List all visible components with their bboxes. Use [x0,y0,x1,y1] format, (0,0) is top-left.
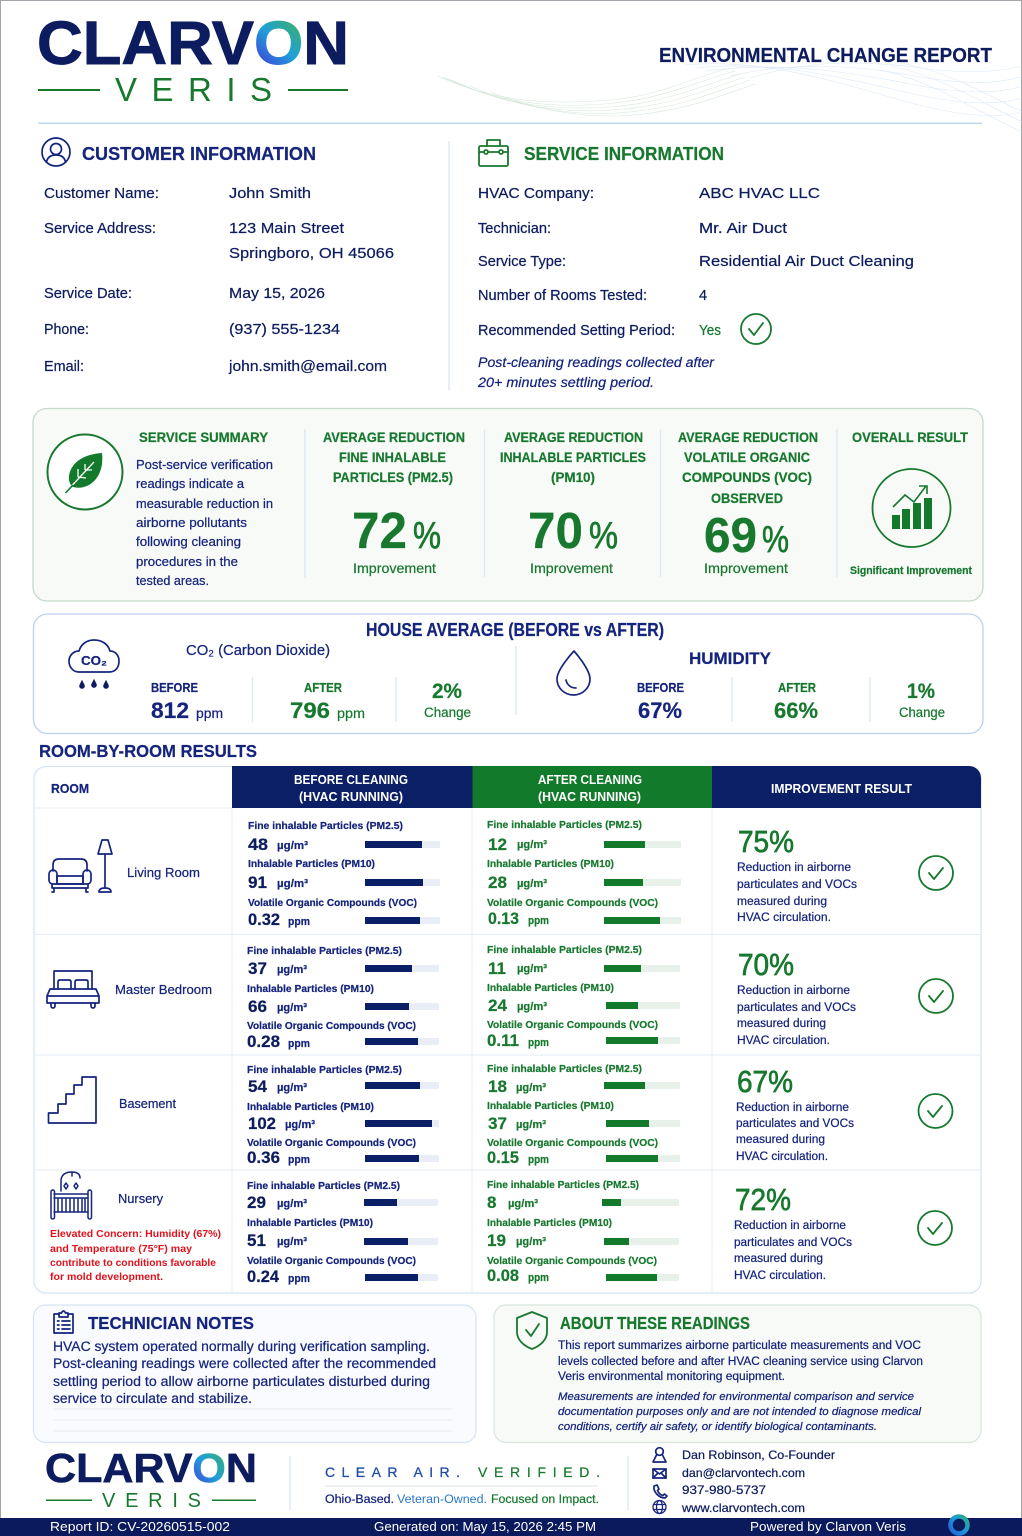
footer bar: Report ID: CV-20260515-002 [50,1520,230,1534]
service details: Mr. Air Duct [699,220,788,237]
before readings: Basement: 0.36 [247,1148,280,1167]
before readings: Living Room: Fine inhalable Particles (PM2.5) [248,820,403,832]
heading: room-by-room results: ROOM-BY-ROOM RESULTS [39,741,257,761]
footer tagline: VERIFIED. [478,1464,600,1480]
before readings: Nursery: 29 [247,1193,266,1212]
row: Nursery: Nursery [118,1191,163,1206]
service details: HVAC Company: [478,186,594,202]
after readings: Master Bedroom: Inhalable Particles (PM10) [487,982,614,994]
after readings: Nursery: ppm [528,1272,549,1284]
after readings: Basement [487,1063,680,1167]
customer details: Phone: [44,321,89,338]
before readings: Nursery: µg/m³ [277,1236,307,1248]
before readings: Master Bedroom [247,945,439,1051]
before readings: Living Room: 48 [248,835,268,854]
heading: service information: SERVICE INFORMATION [524,144,724,164]
before readings: Living Room: 0.32 [248,910,280,929]
table header: ROOM [51,782,89,796]
service summary text: following cleaning [136,535,241,549]
customer details: Email: [44,358,84,375]
icon: brand ring [950,1516,968,1534]
settling note [477,355,715,390]
settling note: 20+ minutes settling period. [477,375,654,390]
after readings: Master Bedroom: Fine inhalable Particles (PM2.5) [487,944,642,956]
after readings: Living Room: Inhalable Particles (PM10) [487,858,614,870]
humidity readings: 67% [638,698,682,723]
technician notes text: service to circulate and stabilize. [53,1391,252,1406]
icon: check [919,979,953,1013]
table header: (HVAC RUNNING) [299,790,403,804]
footer tagline: Focused on Impact. [491,1494,599,1506]
callout: elevated concern [50,1228,221,1283]
icon: confirmed check [741,314,771,344]
row: Living Room [49,819,953,929]
footer contact details: www.clarvontech.com [681,1501,805,1515]
stat: PM10 reduction: INHALABLE PARTICLES [500,450,646,465]
icon: shield [517,1312,547,1349]
after readings: Nursery: 0.08 [487,1266,519,1285]
improvement: Master Bedroom [737,947,953,1047]
row: Basement: Basement [119,1096,176,1111]
service summary text [136,430,273,588]
before readings: Living Room: µg/m³ [277,878,308,890]
humidity readings: 1% [907,680,935,703]
icon: CO2 cloud [69,640,119,689]
service details: Recommended Setting Period: [478,323,675,339]
stat: PM10 reduction: AVERAGE REDUCTION [504,430,643,445]
after readings: Living Room: 12 [488,835,507,854]
before readings: Nursery: µg/m³ [277,1198,307,1210]
icon: briefcase [479,140,508,166]
before readings: Basement [247,1064,439,1167]
callout: elevated concern: for mold development. [50,1271,163,1283]
CO2 readings: ppm [337,705,365,721]
humidity readings: HUMIDITY [689,649,772,668]
footer contact details: 937-980-5737 [682,1483,766,1497]
improvement: Basement: 67% [737,1064,793,1099]
before readings: Nursery: Volatile Organic Compounds (VOC) [247,1255,416,1267]
CO2 readings: 2% [432,680,462,703]
callout: elevated concern: Elevated Concern: Humidity (67%) [50,1228,221,1240]
improvement: Master Bedroom: particulates and VOCs [737,1002,856,1014]
technician notes text: settling period to allow airborne particulates disturbed during [53,1374,430,1389]
panel: about these readings [494,1305,981,1442]
improvement: Master Bedroom: HVAC circulation. [737,1035,830,1047]
stat: VOC reduction: AVERAGE REDUCTION [678,430,818,445]
before readings: Living Room [248,820,440,929]
after readings: Basement: µg/m³ [516,1082,546,1094]
stat: PM10 reduction: Improvement [530,560,613,576]
icon: leaf [48,434,122,510]
customer details: john.smith@email.com [228,358,387,375]
footer tagline: CLEAR AIR. [325,1464,460,1480]
icon: check [919,856,953,890]
stat: PM2.5 reduction: % [413,515,441,557]
improvement: Nursery: 72% [735,1182,791,1217]
icon: envelope [653,1469,666,1478]
customer details: Springboro, OH 45066 [229,245,394,262]
icon: sofa and lamp [49,840,112,892]
improvement: Basement: particulates and VOCs [736,1118,854,1130]
CO2 readings [151,642,471,723]
panel: customer information [42,138,394,375]
footer tagline [325,1464,600,1506]
before readings: Nursery: 0.24 [247,1267,280,1286]
service details [478,185,914,339]
stat: PM2.5 reduction: 72 [352,502,407,559]
footer tagline: Veteran-Owned. [397,1494,487,1506]
about text: conditions, certify air safety, or identify biological contaminants. [558,1421,877,1433]
before readings: Basement: µg/m³ [277,1082,307,1094]
after readings: Nursery: 19 [487,1231,506,1250]
improvement: Basement [736,1064,952,1163]
icon: check [918,1211,952,1245]
customer details [44,185,394,375]
footer bar: Generated on: May 15, 2026 2:45 PM [374,1520,596,1534]
report title: ENVIRONMENTAL CHANGE REPORT [659,44,992,67]
icon: stairs [48,1077,96,1123]
improvement: Living Room [737,824,953,924]
before readings: Master Bedroom: ppm [288,1038,310,1050]
table: room-by-room results [34,766,981,1293]
improvement: Nursery: Reduction in airborne [734,1220,846,1232]
technician notes text [53,1339,436,1406]
before readings: Master Bedroom: 37 [248,959,267,978]
callout: elevated concern: contribute to conditions favorable [50,1257,216,1269]
after readings: Basement: 18 [488,1077,507,1096]
improvement: Master Bedroom: measured during [737,1018,826,1030]
after readings: Master Bedroom: 11 [488,959,506,978]
service summary text: airborne pollutants [136,516,247,530]
service summary text: Post-service verification [136,458,273,472]
technician notes text: Post-cleaning readings were collected after the recommended [53,1356,436,1371]
after readings: Master Bedroom [487,944,680,1050]
after readings: Basement: ppm [528,1154,549,1166]
after readings: Master Bedroom: Volatile Organic Compounds (VOC) [487,1019,658,1031]
CO2 readings: CO₂ (Carbon Dioxide) [186,642,330,659]
service details: Residential Air Duct Cleaning [699,253,914,270]
service details: Number of Rooms Tested: [478,288,647,304]
CO2 readings: 812 [151,698,189,723]
before readings: Basement: µg/m³ [285,1119,315,1131]
stat: PM10 reduction: 70 [528,502,583,559]
after readings: Living Room [487,819,681,928]
improvement: Living Room: 75% [738,824,794,859]
about text: Veris environmental monitoring equipment. [558,1371,785,1383]
stat: VOC reduction: 69 [704,509,757,563]
after readings: Living Room: µg/m³ [517,878,547,890]
row: Living Room: Living Room [127,865,200,880]
before readings: Nursery: ppm [288,1273,310,1285]
improvement: Nursery: measured during [734,1253,823,1265]
improvement: Nursery [734,1182,952,1282]
panel: house average [34,614,983,734]
customer details: May 15, 2026 [229,285,325,302]
stat: VOC reduction: COMPOUNDS (VOC) [682,470,812,485]
after readings: Nursery: Fine inhalable Particles (PM2.5) [487,1179,639,1191]
about text: documentation purposes only and are not intended to diagnose medical [558,1406,922,1418]
after readings: Nursery: µg/m³ [516,1236,546,1248]
row: Master Bedroom: Master Bedroom [115,982,212,997]
stat: PM2.5 reduction: PARTICLES (PM2.5) [333,470,453,485]
before readings: Master Bedroom: µg/m³ [277,964,307,976]
before readings: Nursery: 51 [247,1231,266,1250]
humidity readings: 66% [774,698,818,723]
before readings: Nursery: Inhalable Particles (PM10) [247,1217,373,1229]
icon: bed [47,971,99,1008]
service details: Technician: [478,221,551,237]
row: Nursery [50,1172,952,1286]
service summary text: procedures in the [136,555,238,569]
table header: AFTER CLEANING [538,773,642,787]
after readings: Living Room: 0.13 [488,909,519,928]
decorative header wave [438,63,1022,132]
customer details: Service Date: [44,285,132,302]
after readings: Nursery: 8 [487,1193,496,1212]
icon: clipboard [54,1311,73,1333]
improvement: Basement: HVAC circulation. [736,1151,828,1163]
customer details: (937) 555-1234 [229,321,340,338]
table header [51,766,981,808]
improvement: Nursery: HVAC circulation. [734,1270,826,1282]
humidity readings: BEFORE [637,681,684,695]
stat: overall result [850,430,972,577]
customer details: 123 Main Street [229,220,345,237]
footer tagline: Ohio-Based. [325,1494,394,1506]
improvement: Living Room: measured during [737,896,827,908]
after readings: Living Room: 28 [488,873,507,892]
before readings: Basement: 54 [248,1077,268,1096]
customer details: Service Address: [44,220,156,237]
footer bar: Powered by Clarvon Veris [750,1520,906,1534]
icon: customer [42,138,70,166]
after readings: Nursery: Inhalable Particles (PM10) [487,1217,612,1229]
table header: (HVAC RUNNING) [538,790,641,804]
about text: levels collected before and after HVAC cleaning service using Clarvon [558,1356,923,1368]
before readings: Living Room: µg/m³ [277,840,308,852]
humidity readings: AFTER [778,681,816,695]
before readings: Basement: Fine inhalable Particles (PM2.5) [247,1064,402,1076]
stat: overall result: Significant Improvement [850,565,972,577]
improvement: Living Room: HVAC circulation. [737,912,831,924]
stat: PM2.5 reduction [323,430,465,576]
footer contact details: Dan Robinson, Co-Founder [682,1448,835,1462]
stat: overall result: OVERALL RESULT [852,430,969,445]
service details: 4 [699,288,707,304]
icon: CO2 cloud: CO₂ [81,653,107,668]
before readings: Basement: Inhalable Particles (PM10) [247,1101,374,1113]
after readings: Basement: 0.15 [487,1148,519,1167]
row: Basement [48,1063,952,1167]
CO2 readings: 796 [290,698,330,723]
footer contact details [653,1448,835,1515]
table header: BEFORE CLEANING [294,773,408,787]
CO2 readings: Change [424,705,471,720]
customer details: John Smith [229,185,311,202]
logo: Clarvon Veris [37,9,349,108]
before readings: Basement: 102 [248,1114,276,1133]
stat: VOC reduction: Improvement [704,560,788,576]
about text: This report summarizes airborne particulate measurements and VOC [558,1340,921,1352]
before readings: Living Room: Inhalable Particles (PM10) [248,858,375,870]
icon: person [653,1448,666,1462]
before readings: Nursery [247,1180,438,1286]
about text [558,1340,923,1433]
icon: check [918,1094,952,1128]
humidity readings: Change [899,705,945,720]
service summary text: readings indicate a [136,477,244,491]
CO2 readings: BEFORE [151,681,198,695]
footer contact details: dan@clarvontech.com [682,1466,805,1480]
before readings: Living Room: 91 [248,873,267,892]
after readings: Basement: µg/m³ [516,1119,546,1131]
improvement: Basement: measured during [736,1134,825,1146]
stat: PM10 reduction [500,430,646,576]
after readings: Master Bedroom: 0.11 [487,1031,519,1050]
panel: technician notes [34,1305,476,1442]
icon: water drop [557,651,590,695]
after readings: Nursery [487,1179,679,1285]
stat: PM10 reduction: % [589,515,618,557]
before readings: Nursery: Fine inhalable Particles (PM2.5) [247,1180,400,1192]
after readings: Nursery: Volatile Organic Compounds (VOC) [487,1255,657,1267]
after readings: Basement: 37 [488,1114,507,1133]
footer logo: CLARVON [45,1445,257,1491]
icon: growth chart [872,469,950,547]
stat: VOC reduction [678,430,818,576]
after readings: Master Bedroom: 24 [488,996,508,1015]
before readings: Master Bedroom: µg/m³ [277,1002,307,1014]
service details: ABC HVAC LLC [699,185,820,202]
settling note: Post-cleaning readings collected after [478,355,715,370]
after readings: Living Room: µg/m³ [517,839,547,851]
before readings: Master Bedroom: Volatile Organic Compounds (VOC) [247,1020,416,1032]
before readings: Basement: ppm [288,1154,310,1166]
footer logo [45,1445,257,1512]
CO2 readings: ppm [196,705,223,721]
stat: VOC reduction: VOLATILE ORGANIC [684,450,810,465]
callout: elevated concern: and Temperature (75°F) may [50,1243,192,1255]
after readings: Nursery: µg/m³ [508,1198,538,1210]
after readings: Basement: Volatile Organic Compounds (VOC) [487,1137,658,1149]
humidity readings [637,649,945,723]
customer details: Customer Name: [44,185,159,202]
before readings: Master Bedroom: 0.28 [247,1032,280,1051]
logo: Clarvon Veris: VERIS [115,71,272,108]
before readings: Master Bedroom: Fine inhalable Particles (PM2.5) [247,945,402,957]
before readings: Master Bedroom: 66 [248,997,267,1016]
after readings: Living Room: Volatile Organic Compounds (VOC) [487,897,658,909]
stat: VOC reduction: % [762,519,789,560]
after readings: Master Bedroom: µg/m³ [517,1001,547,1013]
stat: PM2.5 reduction: AVERAGE REDUCTION [323,430,465,445]
after readings: Master Bedroom: µg/m³ [517,963,547,975]
technician notes text: HVAC system operated normally during verification sampling. [53,1339,430,1354]
stat: VOC reduction: OBSERVED [711,491,783,506]
after readings: Living Room: Fine inhalable Particles (PM2.5) [487,819,642,831]
improvement: Nursery: particulates and VOCs [734,1237,852,1249]
after readings: Master Bedroom: ppm [528,1037,549,1049]
panel: service summary [33,408,983,601]
before readings: Living Room: Volatile Organic Compounds (VOC) [248,897,417,909]
row: Master Bedroom [47,944,953,1051]
after readings: Basement: Inhalable Particles (PM10) [487,1100,614,1112]
service details: Yes [699,323,721,339]
heading: customer information: CUSTOMER INFORMATION [82,144,316,164]
CO2 readings: AFTER [304,681,342,695]
improvement: Master Bedroom: 70% [738,947,794,982]
service summary text: SERVICE SUMMARY [139,430,268,445]
footer bar [0,1516,1022,1536]
heading: technician notes: TECHNICIAN NOTES [88,1313,254,1333]
panel: service information [477,140,914,390]
stat: PM10 reduction: (PM10) [551,470,595,485]
after readings: Basement: Fine inhalable Particles (PM2.5) [487,1063,642,1075]
service summary text: measurable reduction in [136,497,273,511]
stat: PM2.5 reduction: Improvement [353,560,436,576]
heading: about these readings: ABOUT THESE READINGS [560,1313,750,1333]
logo: Clarvon Veris: CLARVON [37,9,349,77]
service summary text: tested areas. [136,574,209,588]
after readings: Living Room: ppm [528,915,549,927]
improvement: Master Bedroom: Reduction in airborne [737,985,850,997]
icon: phone [654,1485,667,1498]
before readings: Living Room: ppm [288,916,310,928]
stat: PM2.5 reduction: FINE INHALABLE [339,450,446,465]
about text: Measurements are intended for environmental comparison and service [558,1391,914,1403]
service details: Service Type: [478,254,566,270]
before readings: Master Bedroom: Inhalable Particles (PM10) [247,983,374,995]
improvement: Living Room: Reduction in airborne [737,862,851,874]
footer logo: VERIS [102,1490,201,1512]
icon: globe [653,1500,666,1514]
before readings: Basement: Volatile Organic Compounds (VOC) [247,1137,416,1149]
icon: crib [51,1172,92,1219]
improvement: Basement: Reduction in airborne [736,1102,849,1114]
table header: IMPROVEMENT RESULT [771,782,912,796]
heading: house average: HOUSE AVERAGE (BEFORE vs AFTER) [366,620,664,640]
improvement: Living Room: particulates and VOCs [737,879,857,891]
